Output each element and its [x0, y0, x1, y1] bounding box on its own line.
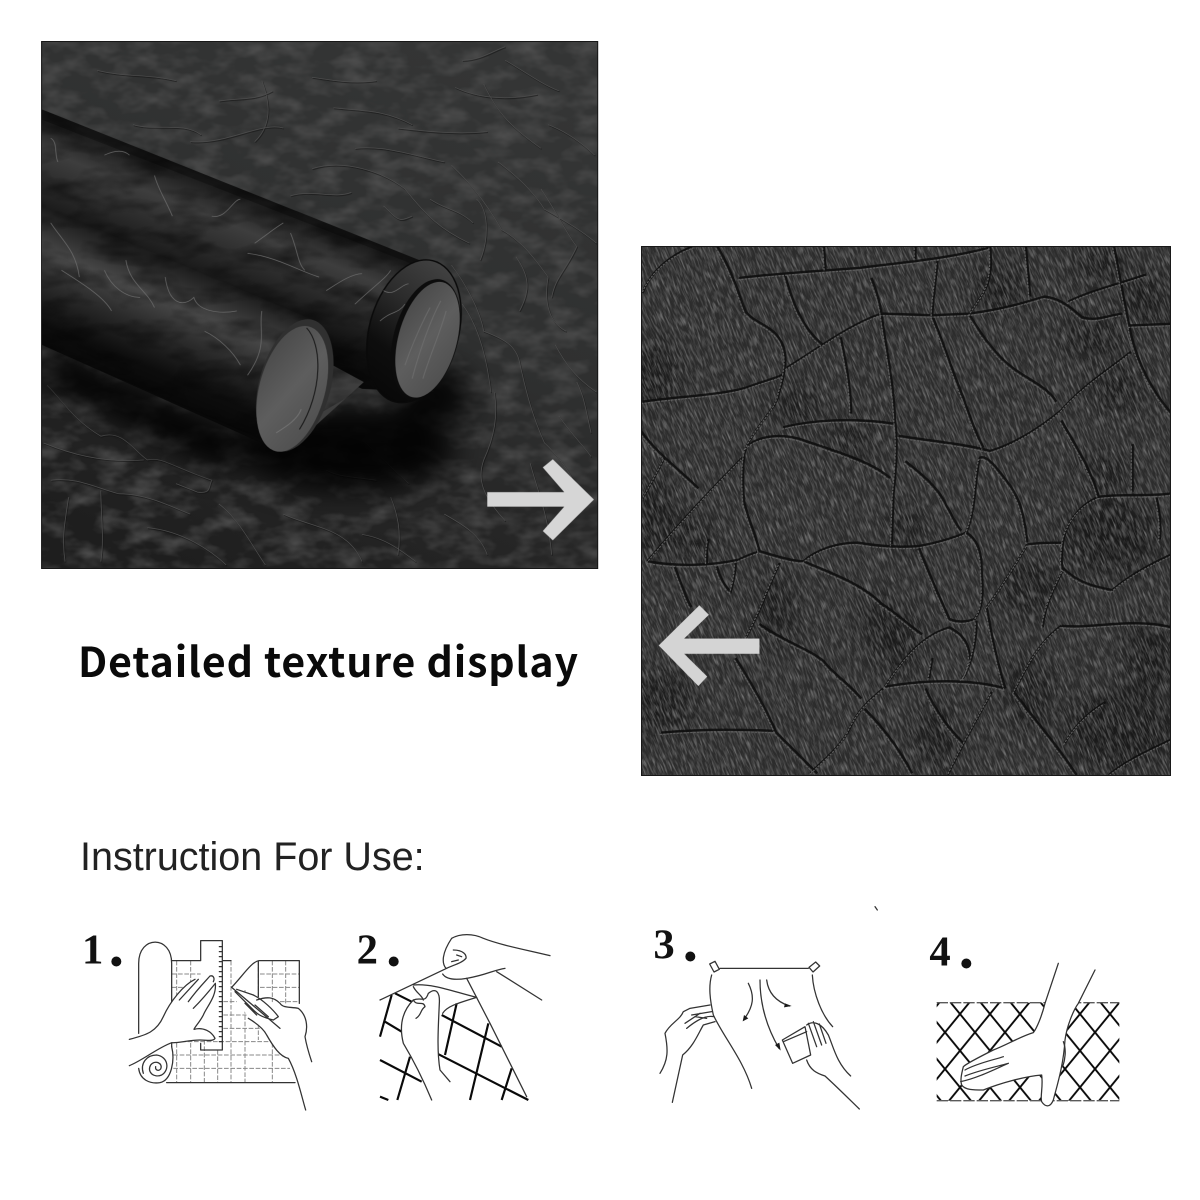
floor cracks — [44, 47, 597, 566]
smoothing arrows — [744, 980, 789, 1048]
panel: rolled wallpaper photo — [41, 41, 598, 569]
leaf-vein embossed lines — [639, 246, 1172, 777]
shadow under rolls — [42, 345, 473, 492]
instruction steps 1 and 2 — [82, 911, 551, 1111]
step 4: press onto wall — [929, 913, 1119, 1106]
step number 3: . — [683, 907, 698, 975]
roll surface mottling — [42, 121, 390, 411]
step 3: smooth with squeegee — [653, 907, 877, 1109]
step number 2: . — [386, 911, 401, 979]
step number 3: 3 — [653, 922, 675, 969]
step number 1: . — [109, 911, 124, 979]
step 1: measure and cut — [82, 911, 312, 1110]
front roll end — [256, 319, 334, 452]
roll surface cracks — [51, 138, 409, 375]
left hand — [129, 976, 216, 1066]
tape pieces — [710, 961, 820, 972]
arrow: pointing right — [487, 459, 594, 540]
step number 4: 4 — [929, 928, 951, 975]
panel: close-up texture photo — [641, 246, 1171, 776]
back roll end — [366, 259, 462, 404]
instruction steps 3 and 4 — [653, 906, 1120, 1110]
step number 2: 2 — [357, 926, 378, 973]
arrow: pointing left — [659, 605, 759, 686]
front wallpaper roll body — [42, 206, 364, 451]
diamond pattern wall — [937, 1003, 1119, 1101]
heading: instruction for use: Instruction For Use: — [80, 835, 425, 879]
step 2: peel backing — [357, 911, 550, 1100]
heading: detailed texture display: Detailed texture display — [78, 630, 578, 689]
back wallpaper roll — [42, 109, 434, 392]
step number 4: . — [959, 913, 974, 981]
right hand with knife — [232, 987, 312, 1110]
step number 1: 1 — [82, 926, 103, 973]
